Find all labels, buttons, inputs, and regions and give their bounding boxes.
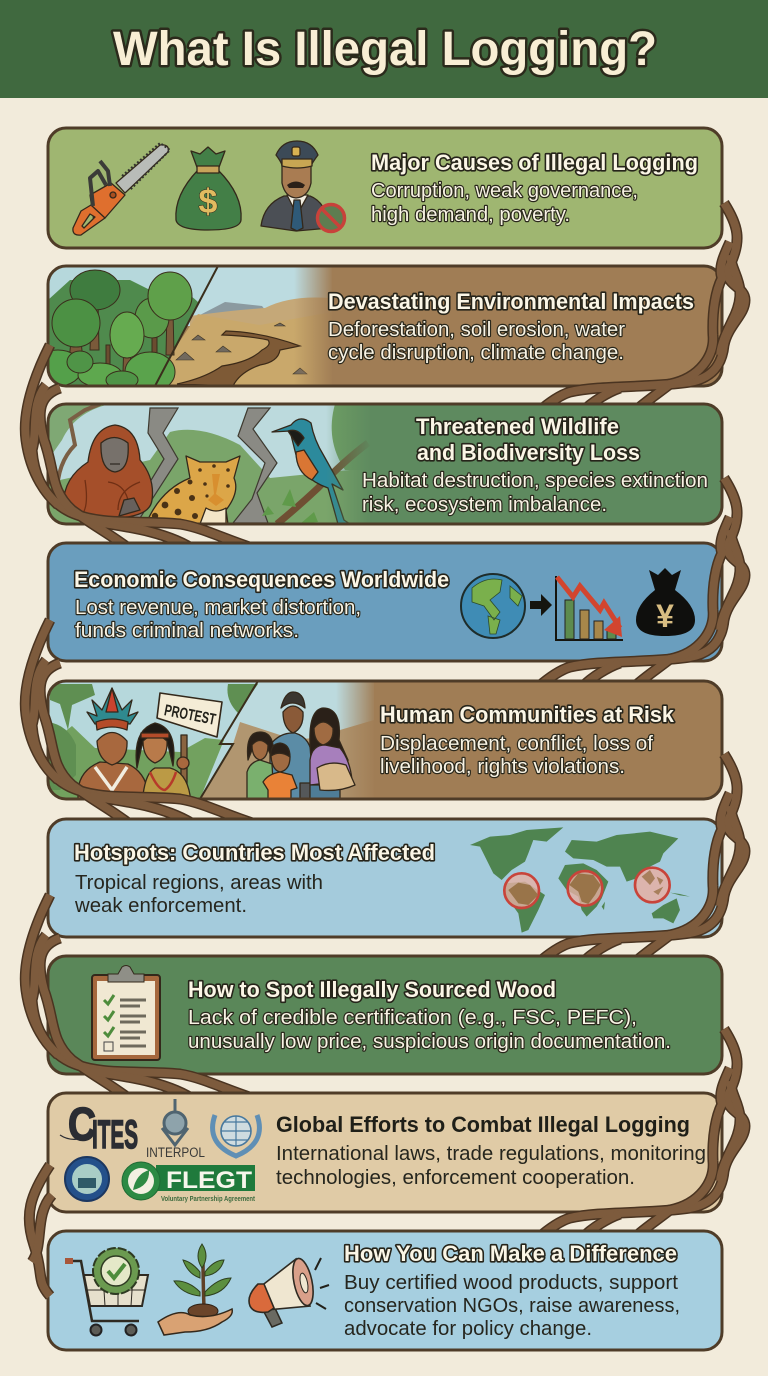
heading: How You Can Make a Difference [344,1241,677,1266]
logo: round seal [65,1157,109,1201]
icon: black arrow [530,594,552,616]
body text: Buy certified wood products, support [344,1271,678,1294]
heading: Hotspots: Countries Most Affected [74,840,435,865]
logo: CITES: C [68,1098,96,1150]
body text: Tropical regions, areas with [75,871,323,894]
illustration: orangutan, jaguar and bird [48,404,372,524]
icon: money bag [176,147,241,230]
body text [276,1142,706,1189]
body text: unusually low price, suspicious origin documentation. [188,1030,671,1053]
body text [380,732,653,778]
vines twisting between panels [25,203,745,1296]
body text: Displacement, conflict, loss of [380,732,653,755]
body text [362,469,708,516]
body text: risk, ecosystem imbalance. [362,493,607,516]
panel: hotspots [48,819,722,937]
panel: wildlife and biodiversity [48,404,722,524]
heading: Threatened Wildlife [416,414,619,439]
body text: cycle disruption, climate change. [328,341,624,364]
icon: megaphone [249,1257,329,1327]
body text: Deforestation, soil erosion, water [328,318,625,341]
panel: global efforts [48,1093,722,1212]
icon: yen money bag [636,568,695,636]
panel: human communities [48,681,722,799]
icon: clipboard checklist [92,966,160,1060]
heading: Economic Consequences Worldwide [74,567,449,592]
panel: economic consequences [48,543,722,661]
logo: CITES [60,1098,138,1157]
logo: FLEGT: FLEGT [166,1167,252,1194]
heading: Global Efforts to Combat Illegal Logging [276,1112,690,1137]
heading: How to Spot Illegally Sourced Wood [188,977,556,1002]
body text [371,179,638,226]
body text [344,1271,680,1340]
body text: Corruption, weak governance, [371,179,638,202]
logo: FLEGT: Voluntary Partnership Agreement [161,1194,255,1203]
title: What Is Illegal Logging? [113,23,657,76]
body text: conservation NGOs, raise awareness, [344,1294,680,1317]
body text: Lost revenue, market distortion, [75,596,361,619]
panel: make a difference [48,1231,722,1350]
icon: chainsaw [73,143,170,235]
body text: livelihood, rights violations. [380,755,625,778]
body text [74,871,323,917]
heading: Devastating Environmental Impacts [328,289,694,314]
body text: high demand, poverty. [371,203,570,226]
heading [416,414,640,465]
icon: money bag: $ [199,183,218,221]
logo: CITES: ITES [92,1113,138,1157]
body text: advocate for policy change. [344,1317,592,1340]
body text: funds criminal networks. [75,619,299,642]
logo: FLEGT [122,1162,255,1203]
body text: technologies, enforcement cooperation. [276,1166,635,1189]
body text: weak enforcement. [74,894,247,917]
body text [328,318,625,364]
heading: Human Communities at Risk [380,702,675,727]
world map with hotspot circles [470,827,692,933]
panel: environmental impacts [34,266,722,392]
body text [75,596,361,642]
heading: and Biodiversity Loss [417,440,640,465]
title banner [0,0,768,98]
logo: United Nations wreath [213,1115,259,1156]
heading: Major Causes of Illegal Logging [371,150,698,175]
panel: major causes [48,128,722,248]
illustration: protest and displaced family [48,681,376,799]
body text: Lack of credible certification (e.g., FSC, PEFC), [188,1006,637,1029]
icon: shopping cart with badge [65,1248,148,1336]
illustration: forest versus eroded land [50,268,330,384]
icon: yen money bag: ¥ [656,598,674,634]
icon: globe [461,574,525,638]
illustration: protest and displaced family: PROTEST [163,702,217,729]
icon: officer with prohibition sign [261,141,344,232]
icon: falling bar chart [556,576,623,640]
body text [188,1006,671,1053]
logo: INTERPOL: INTERPOL [146,1145,205,1160]
body text: International laws, trade regulations, monitoring [276,1142,706,1165]
body text: Habitat destruction, species extinction [362,469,708,492]
logo: INTERPOL [146,1099,205,1160]
icon: hand holding seedling [158,1244,232,1335]
panel: spot illegal wood [48,956,722,1074]
